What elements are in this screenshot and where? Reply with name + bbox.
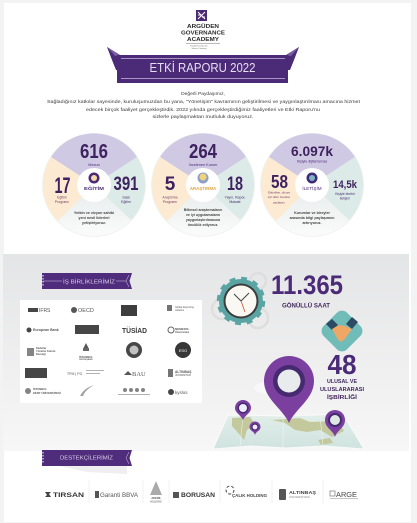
panel: İletişim circle: 58 [271, 172, 288, 192]
panel: Eğitim circle: 616 [80, 141, 108, 163]
panel: partner logos: Kadınlar [36, 346, 46, 350]
heading ribbon: Destekçilerimiz: DESTEKÇİLERİMİZ [60, 454, 114, 462]
logo: Akkök Holding: AKKÖK [151, 497, 161, 500]
stat: partnerships: 48 [328, 349, 356, 380]
title banner [107, 47, 299, 83]
stat: volunteer hours: GÖNÜLLÜ SAAT [282, 302, 330, 310]
panel: partner logos: BÜYÜKŞEHİR [79, 358, 93, 361]
panel: partner logos: OECD [78, 308, 94, 314]
title text: ETKİ RAPORU 2022 [150, 61, 256, 75]
panel: Araştırma circle: ARAŞTIRMA [190, 186, 217, 191]
intro message: Değerli Paydaşımız, [181, 91, 225, 97]
panel: partner logos: BAU [132, 371, 146, 378]
map with location pins [213, 356, 364, 449]
logo: Argüden Governance Academy: Sabancı University [192, 47, 207, 50]
panel: Araştırma circle: 18 [227, 174, 243, 195]
icon: small pin left [235, 400, 251, 420]
panel: İletişim circle: 6.097k [291, 143, 333, 159]
panel: partner logos: Initiative [175, 309, 185, 312]
panel: Araştırma circle: Programı [163, 200, 177, 204]
stat: partnerships [320, 349, 365, 401]
panel: Araştırma circle: öncülük ediyoruz. [188, 223, 218, 227]
logo: Garanti BBVA [95, 491, 138, 499]
panel: Araştırma circle: Yayın, Rapor, [225, 196, 246, 200]
logo: Arge: ARGE [336, 492, 357, 499]
panel: partner logos: Üniversitesi [175, 331, 189, 334]
panel: partner logos: ALTINBAŞ [175, 370, 192, 374]
panel: İletişim circle: Etkinlikte, dünya [268, 190, 290, 194]
panel: Eğitim circle [42, 133, 146, 237]
logo: Tırsan: TIRSAN [53, 492, 84, 499]
panel: Eğitim circle: yeni nesil liderleri [78, 216, 110, 220]
stat: partnerships: ULUSLARARASI [320, 387, 365, 393]
logo: Tırsan [45, 492, 84, 499]
supporter logos [45, 480, 358, 504]
panel: İletişim circle: Kurumlar ve bireyler [294, 211, 330, 215]
panel: İletişim circle: İLETİŞİM [302, 185, 322, 191]
panel: partner logos: kyslos [175, 390, 188, 395]
logo: Arge [330, 491, 358, 499]
panel: Araştırma circle: Makale [229, 200, 241, 204]
panel: Eğitim circle: Saat [122, 196, 130, 200]
logo: Argüden Governance Academy: Established under the [190, 44, 208, 48]
intro message: edecek birçok faaliyet gerçekleştirdik. 2022 yılında gerçekleştirdiğimiz faaliyetleri ve Etki Raporu'nu [86, 107, 320, 113]
stat: volunteer hours: 11.365 [271, 270, 343, 300]
panel: Eğitim circle: Programı [55, 200, 69, 204]
logo: Argüden Governance Academy: GOVERNANCE [181, 30, 225, 36]
panel: İletişim circle: Kişiyle birebir [335, 192, 356, 196]
panel: partner logos: İSTANBUL [33, 386, 47, 391]
icon: handshake [319, 308, 365, 354]
heading ribbon: Destekçilerimiz [42, 450, 132, 474]
logo: Akkök Holding: HOLDING [150, 500, 162, 504]
panel: Eğitim circle: Eğitim [57, 196, 67, 200]
panel: Araştırma circle: yaygınlaştırılmasına [186, 218, 221, 222]
panel: Eğitim circle: 17 [54, 173, 70, 198]
panel: partner logos [20, 300, 202, 403]
panel: partner logos: ÜNİVERSİTESİ [175, 374, 191, 377]
panel: Araştırma circle: İncelenen Kurum [189, 162, 217, 167]
panel: Eğitim circle: 391 [114, 174, 139, 195]
logo: Çalık Holding: ÇALIK HOLDING [232, 493, 267, 498]
logo: Altınbaş Üniversitesi: ALTINBAŞ [289, 490, 316, 495]
logo: Çalık Holding [226, 486, 267, 498]
logo: Garanti BBVA: Garanti BBVA [100, 493, 138, 499]
panel: Eğitim circle: Eğitim [121, 200, 131, 204]
heading ribbon: İş Birliklerimiz [42, 273, 132, 289]
panel: İletişim circle: için iklim beraber [268, 195, 290, 199]
panel: Araştırma circle: 264 [189, 141, 218, 163]
icon: small pin centre [250, 422, 260, 435]
panel: partner logos: İSTANBUL [79, 354, 93, 359]
panel: İletişim circle: paylaşım [273, 200, 285, 204]
panel: Eğitim circle: EĞİTİM [84, 184, 104, 192]
logo: Akkök Holding [150, 481, 162, 504]
logo: Altınbaş Üniversitesi: ÜNİVERSİTESİ [289, 494, 310, 499]
panel: İletişim circle: iletişim [340, 196, 350, 200]
logo: Borusan: BORUSAN [181, 492, 215, 499]
panel: İletişim circle: arasında bilgi paylaşımını [290, 216, 334, 220]
panel: Araştırma circle: 5 [165, 174, 176, 195]
intro message: sizlerle paylaşmaktan mutluluk duyuyoruz. [152, 114, 254, 120]
panel: Eğitim circle: Mezun [88, 163, 100, 167]
logo: Argüden Governance Academy: ARGÜDEN [187, 23, 219, 30]
panel: Araştırma circle: Bilimsel araştırmaların [184, 208, 222, 212]
panel: İletişim circle: Kişiyle dijital temas [297, 160, 327, 164]
panel: partner logos: NEMESIS [175, 327, 189, 331]
intro message: Sağladığınız katkılar sayesinde, kuruluşumuzdan bu yana, "Yönetişim" kavramının geliştirilmesi ve yaygınlaştırılması amacına hizmet [47, 99, 361, 105]
panel: partner logos: Global Reporting [175, 306, 194, 309]
panel: İletişim circle: 14,5k [333, 179, 358, 191]
logo: Argüden Governance Academy [181, 10, 225, 50]
panel: partner logos: European Bank [33, 328, 59, 332]
panel: partner logos: IFRS [39, 308, 51, 314]
stat: partnerships: İŞBİRLİĞİ [327, 393, 358, 401]
panel: Eğitim circle: yetiştiriyoruz. [82, 221, 106, 225]
panel: partner logos: Yönetim Kurulu [36, 349, 56, 353]
icon: large pin [264, 356, 314, 423]
logo: Argüden Governance Academy: ACADEMY [187, 37, 219, 43]
panel: grey collaboration section [3, 254, 409, 451]
panel: İletişim circle: artırıyoruz. [302, 221, 322, 225]
panel: partner logos: Derneği [36, 352, 46, 356]
icon: small pin right [325, 410, 345, 437]
panel: partner logos: ESO [179, 348, 187, 353]
panel: Araştırma circle: ve iyi uygulamaların [186, 213, 220, 217]
panel: Araştırma circle [151, 133, 255, 237]
stat: partnerships: ULUSAL VE [327, 379, 358, 385]
panel: partner logos: KENT ÜNİVERSİTESİ [33, 390, 61, 395]
panel: partner logos: TÜSİAD [122, 326, 147, 335]
panel: Araştırma circle: Araştırma [162, 196, 178, 200]
heading ribbon: İş Birliklerimiz: İŞ BİRLİKLERİMİZ [63, 278, 116, 286]
panel: Eğitim circle: Yetkin ve vizyon sahibi [74, 211, 114, 215]
panel: partner logos: TPM | PG [67, 372, 83, 376]
icon: gear clock [212, 273, 268, 328]
logo: Altınbaş Üniversitesi [279, 489, 316, 500]
stat: volunteer hours [271, 270, 343, 310]
intro message [47, 91, 361, 120]
panel: İletişim circle [260, 133, 364, 237]
